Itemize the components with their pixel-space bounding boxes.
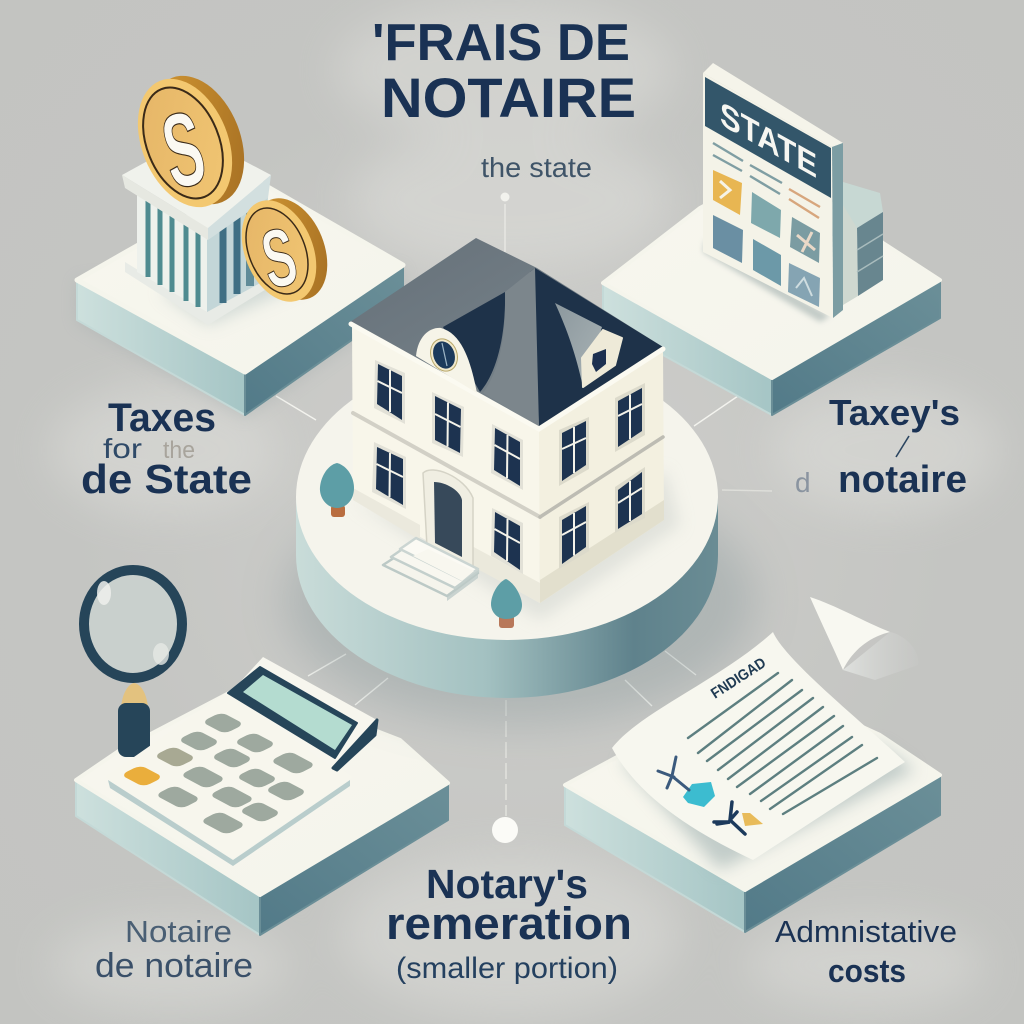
connector lines	[276, 204, 772, 816]
label: taxes for the state: Taxes	[108, 396, 216, 440]
icon: calculator	[108, 657, 377, 866]
document header band: STATE	[720, 94, 817, 186]
front steps	[383, 538, 478, 601]
label: taxes for the state: de State	[81, 456, 252, 502]
right dormer window	[582, 330, 622, 387]
subtitle: the state: the state	[481, 152, 592, 183]
calculator screen	[243, 675, 352, 750]
title: NOTAIRE	[381, 66, 636, 129]
front door	[423, 470, 473, 569]
icon: small gold coin: S	[254, 211, 304, 307]
title: 'FRAIS DE	[372, 14, 630, 72]
document text lines	[713, 143, 820, 218]
house	[350, 238, 664, 603]
windows	[372, 360, 645, 574]
icon: stack of papers	[843, 182, 883, 305]
platform: administrative document	[565, 680, 940, 932]
label: notary's remuneration	[386, 861, 632, 985]
icon: large gold coin	[120, 62, 262, 221]
label: administrative costs: Admnistative	[775, 914, 957, 949]
label: taxes for the state: for	[103, 433, 142, 464]
central disc	[285, 354, 755, 725]
icon: bank pedestal	[122, 135, 271, 325]
arched dormer with round window	[416, 328, 477, 393]
roof	[350, 238, 663, 427]
document header band	[705, 77, 831, 198]
platform: state document	[603, 165, 940, 415]
document seal marks	[658, 757, 763, 834]
title	[372, 14, 636, 129]
label: notaire de notaire: de notaire	[95, 947, 253, 985]
label: notary's remuneration: (smaller portion)	[396, 952, 618, 985]
label: taxes for the state: the	[163, 437, 195, 464]
icon: magnifying glass	[84, 570, 182, 757]
label: taxey's notaire	[795, 392, 967, 501]
document lines	[688, 673, 877, 814]
state document	[703, 63, 843, 318]
connector dot top	[500, 192, 510, 202]
document icon tiles	[713, 170, 820, 307]
label: notary's remuneration: Notary's	[426, 861, 588, 907]
label: taxey's notaire: Taxey's	[829, 392, 960, 433]
document heading: FNDIGAD	[708, 654, 769, 702]
label: taxey's notaire: notaire	[838, 459, 967, 501]
connector dot bottom	[492, 817, 518, 843]
platform: taxes for the state	[77, 179, 403, 418]
tree right	[491, 579, 522, 628]
icon: legal document	[612, 632, 915, 870]
label: taxes for the state	[81, 396, 252, 502]
house walls	[352, 325, 664, 603]
label: administrative costs: costs	[828, 953, 906, 989]
calculator keys	[123, 713, 314, 834]
platform: calculator	[76, 682, 448, 935]
label: administrative costs	[775, 914, 957, 989]
label: notaire de notaire	[95, 914, 253, 985]
label: taxey's notaire: d	[795, 467, 811, 498]
icon: large gold coin: S	[153, 89, 214, 212]
icon: small gold coin	[228, 187, 341, 313]
label: notary's remuneration: remeration	[386, 898, 632, 949]
label: notaire de notaire: Notaire	[125, 914, 232, 949]
eave and string course trim	[351, 324, 663, 517]
icon: paper curl	[810, 597, 918, 680]
tree left	[320, 463, 354, 517]
